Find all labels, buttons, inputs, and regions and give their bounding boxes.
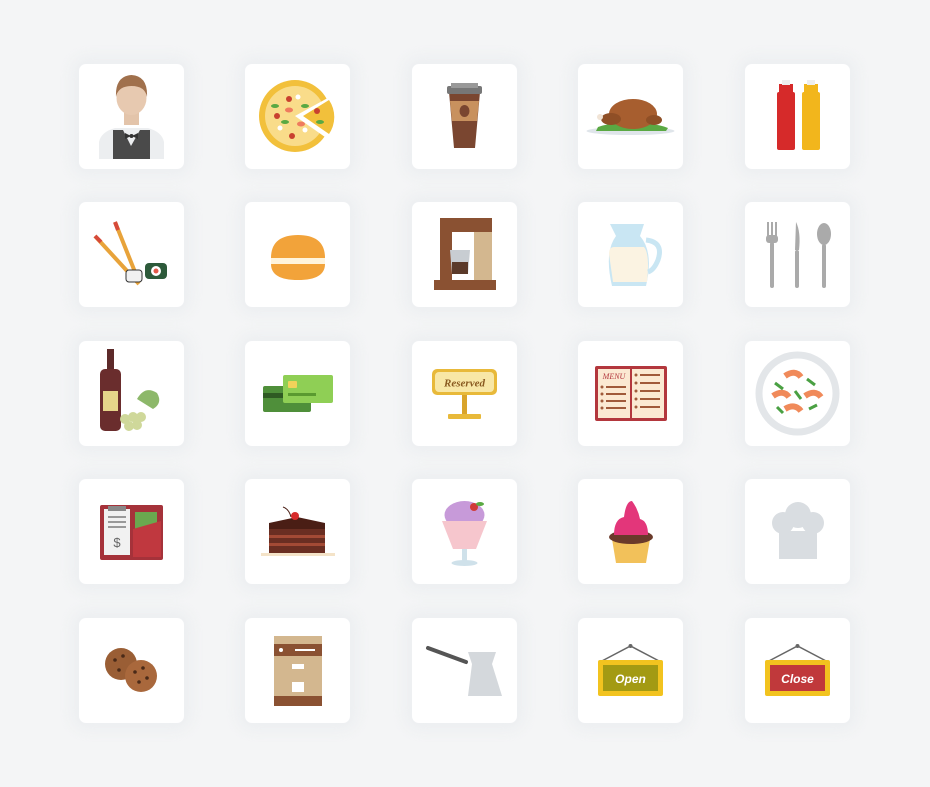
card: open sign: Open [615, 672, 646, 686]
card: bill folder: $ [143, 526, 149, 538]
card: pizza [245, 64, 350, 169]
card: waiter [79, 64, 184, 169]
card: sushi [79, 202, 184, 307]
card: bill folder [79, 479, 184, 584]
card: reserved sign [412, 341, 517, 446]
card: espresso machine [245, 618, 350, 723]
card: open sign [578, 618, 683, 723]
card: cupcake [578, 479, 683, 584]
card: menu: MENU [602, 372, 627, 381]
card: shrimp plate [745, 341, 850, 446]
card: cutlery [745, 202, 850, 307]
card: wine and grapes [79, 341, 184, 446]
card: ketchup and mustard [745, 64, 850, 169]
card: coffee maker [412, 202, 517, 307]
card: roast turkey [578, 64, 683, 169]
card: cake slice [245, 479, 350, 584]
card: reserved sign: Reserved [443, 378, 485, 390]
card: chef hat [745, 479, 850, 584]
card: cookies [79, 618, 184, 723]
card: close sign [745, 618, 850, 723]
card: macaron [245, 202, 350, 307]
card: bill folder: $ [113, 535, 121, 550]
card: ice cream sundae [412, 479, 517, 584]
card: coffee cup [412, 64, 517, 169]
card: menu [578, 341, 683, 446]
card: cezve pot [412, 618, 517, 723]
card: milk jug [578, 202, 683, 307]
card: close sign: Close [781, 672, 814, 686]
card: credit cards [245, 341, 350, 446]
